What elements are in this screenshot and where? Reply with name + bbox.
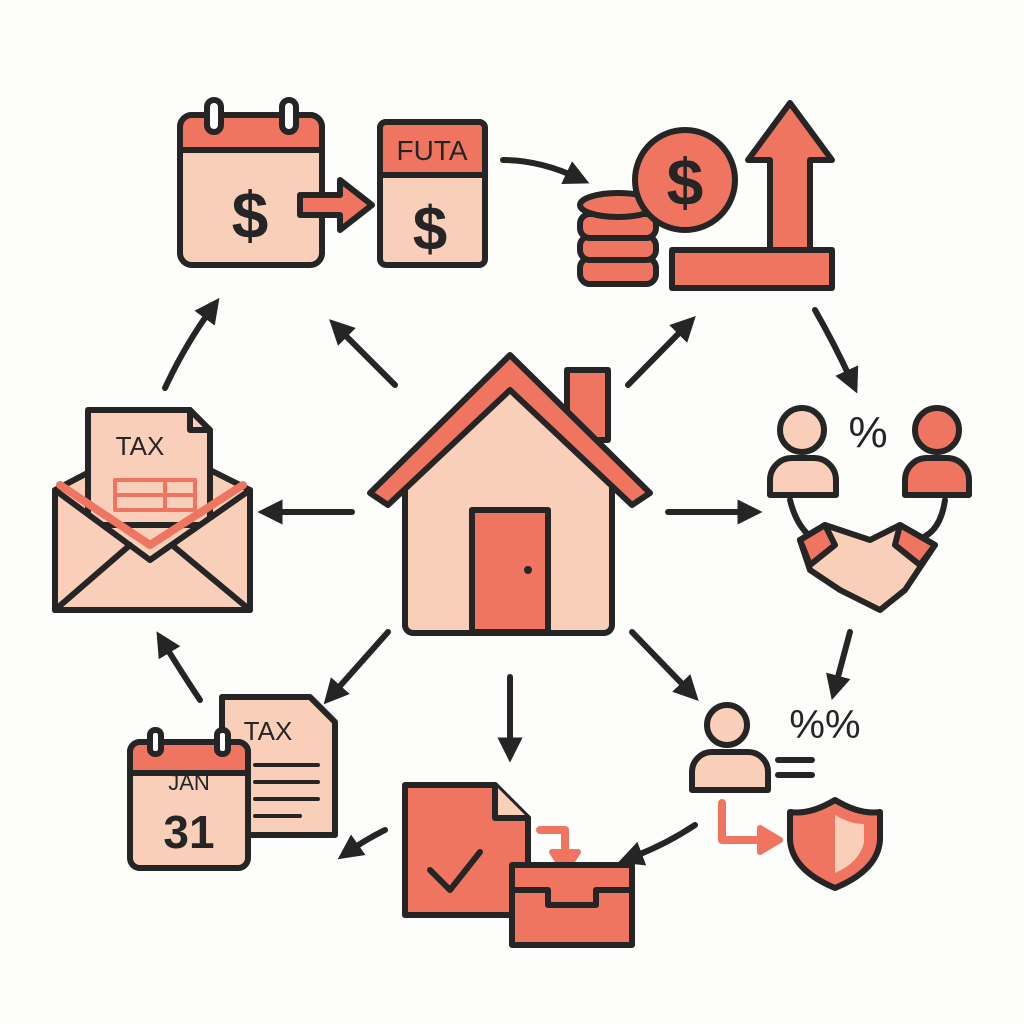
- arrow: to envelope: [163, 642, 200, 700]
- arrow: to partners: [815, 310, 852, 382]
- arrow: calendar to FUTA: [300, 180, 372, 230]
- arrow: to coins: [503, 160, 578, 178]
- icon: FUTA document: $: [413, 195, 447, 264]
- icon: coins and growth: [580, 103, 832, 288]
- icon: January 31 calendar with tax form: JAN: [168, 770, 210, 795]
- icon: FUTA document: [380, 122, 485, 265]
- icon: partners with percent and handshake: %: [848, 408, 888, 457]
- arrow: to calendar: [165, 308, 212, 388]
- icon: January 31 calendar with tax form: 31: [163, 806, 215, 858]
- icon: employee with percent and shield: [692, 703, 880, 888]
- icon: envelope with tax form: TAX: [116, 431, 164, 461]
- icon: January 31 calendar with tax form: [130, 697, 335, 868]
- arrows: from house: [270, 325, 750, 750]
- icon: partners with percent and handshake: [770, 408, 969, 610]
- icon: envelope with tax form: [55, 410, 250, 610]
- icon: calendar with dollar: [180, 100, 322, 265]
- icon: January 31 calendar with tax form: TAX: [244, 716, 292, 746]
- icon: approved document and inbox: [405, 785, 632, 945]
- arrow: to deadline: [348, 830, 385, 852]
- icon: FUTA document: FUTA: [396, 135, 468, 166]
- icon: central house: [370, 355, 650, 633]
- icon: employee with percent and shield: %%: [789, 703, 861, 747]
- icon: calendar with dollar: $: [232, 178, 268, 252]
- arrow: to filing: [630, 825, 695, 858]
- icon: coins and growth: $: [667, 145, 703, 219]
- arrow: to employee: [835, 632, 850, 688]
